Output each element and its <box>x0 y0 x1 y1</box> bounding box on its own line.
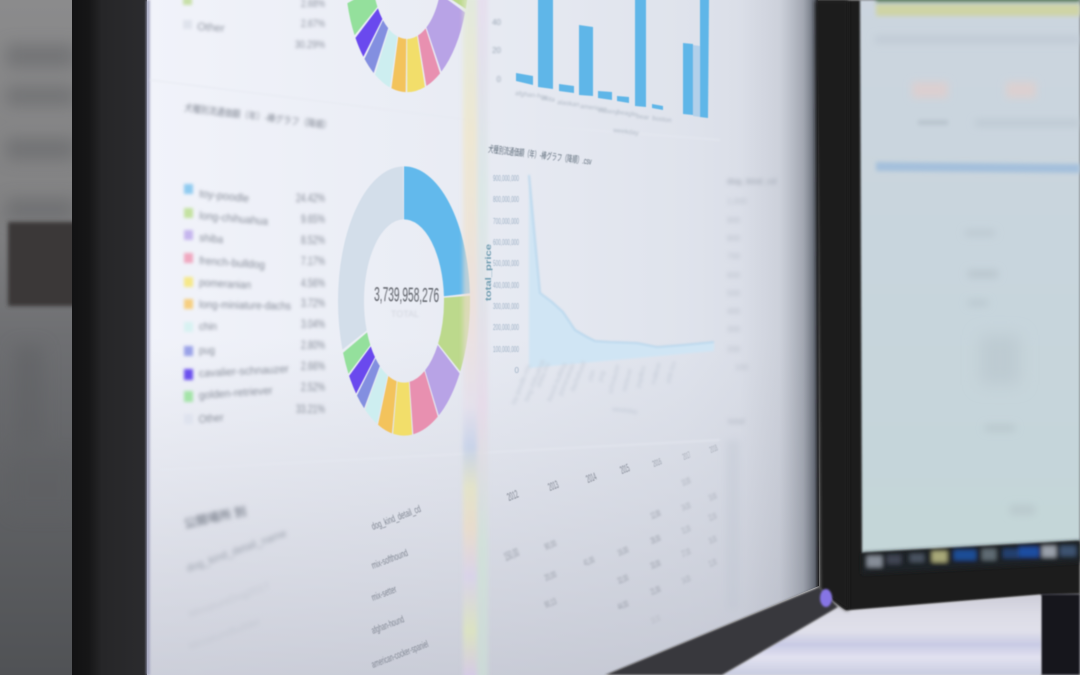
side list far right of the screen <box>727 177 776 426</box>
legend percentages: 3.72% <box>301 296 325 310</box>
y axis labels: 400,000,000 <box>493 281 519 290</box>
legend percentages: 4.56% <box>301 276 325 290</box>
donut center total: TOTAL <box>391 309 419 319</box>
bar chart category labels: weekday <box>612 127 640 137</box>
area chart x labels: pomeranian <box>557 362 577 397</box>
y axis labels: 800,000,000 <box>493 195 519 204</box>
y axis labels: 100,000,000 <box>493 345 519 354</box>
area chart x labels: weekday <box>611 406 639 416</box>
legend labels <box>198 188 292 426</box>
legend percentages: 7.17% <box>301 254 325 268</box>
main monitor bottom bezel <box>605 587 838 675</box>
area chart <box>483 174 714 416</box>
area chart x labels: shiba-inu <box>535 361 552 389</box>
bar chart category labels: boston <box>652 115 672 124</box>
legend labels: toy-poodle <box>199 188 250 205</box>
table left column: MiniatureDog2017 <box>187 580 272 621</box>
bar chart <box>492 0 709 137</box>
y axis labels: 700,000,000 <box>493 217 519 226</box>
area fill and line <box>529 175 714 368</box>
side list far right of the screen: 100 <box>735 363 749 372</box>
table dog kind column: mix-softhound <box>370 548 410 572</box>
main monitor right bezel <box>815 0 848 611</box>
y axis labels: 200,000,000 <box>493 323 519 332</box>
table values: 44,00 <box>616 598 630 612</box>
table values: 41,00 <box>582 554 596 568</box>
side list far right of the screen: 800 <box>727 234 741 243</box>
table year headers: 2016 <box>651 456 663 469</box>
area chart x labels: retriever <box>621 367 634 393</box>
legend labels: long-chihuahua <box>199 210 269 228</box>
monitor stand <box>1041 594 1080 675</box>
area chart x labels <box>510 359 678 416</box>
bar chart category labels: akita <box>541 95 556 104</box>
top legend remainder <box>183 0 325 51</box>
right monitor <box>815 0 1080 675</box>
legend labels: Other <box>198 412 224 426</box>
y axis labels: 900,000,000 <box>493 174 519 183</box>
table values: 32,00 <box>616 572 630 586</box>
table values: 27,00 <box>680 546 692 559</box>
legend percentages <box>296 191 325 416</box>
top donut chart partial <box>358 0 456 66</box>
table values: 21,00 <box>649 584 662 597</box>
legend percentages: 2.66% <box>301 359 325 373</box>
bar chart category labels: alaskan <box>557 99 580 109</box>
data table: 16,00 <box>707 534 718 546</box>
side list far right of the screen: 500 <box>727 289 741 298</box>
bar chart axis labels: 20 <box>492 46 502 55</box>
y axis labels <box>493 174 520 375</box>
table year headers: 2013 <box>547 479 560 494</box>
legend labels: cavalier-schnauzer <box>199 363 289 380</box>
legend percentages: 24.42% <box>296 191 325 205</box>
table values: 10,00 <box>680 475 692 488</box>
bar chart category labels: beagle <box>617 109 637 118</box>
legend percentages: 2.52% <box>301 380 325 394</box>
right monitor screen <box>860 0 1080 553</box>
legend labels: golden-retriever <box>198 385 273 402</box>
moire rainbow band <box>463 0 488 675</box>
side list far right of the screen: 200 <box>727 345 741 354</box>
donut center total: 3,739,958,276 <box>374 284 439 307</box>
side list far right of the screen: 600 <box>727 271 741 280</box>
bar chart category labels: basenji <box>598 107 619 116</box>
table dog kind column: mix-setter <box>370 584 399 604</box>
table left column: MiniatureBuilder <box>187 615 263 653</box>
table values: 33,00 <box>649 558 662 571</box>
table left column: 公開場所 別 <box>183 503 248 531</box>
table values: 28,00 <box>649 533 662 546</box>
bars <box>516 0 709 118</box>
power indicator LED <box>820 589 832 607</box>
main monitor left bezel <box>72 0 147 675</box>
right monitor bezel <box>815 0 1080 611</box>
legend percentages: 33.21% <box>296 402 325 416</box>
main donut chart <box>351 193 457 409</box>
data table: 22,00 <box>707 511 718 523</box>
data table: 19,00 <box>707 491 718 503</box>
area chart x labels: french-bulldog <box>546 362 568 403</box>
data table <box>183 440 740 675</box>
legend labels: pomeranian <box>199 277 251 292</box>
legend percentages: 2.80% <box>301 338 325 352</box>
table values: 31,00 <box>680 523 692 536</box>
legend swatches <box>184 184 193 424</box>
legend labels: pug <box>199 345 215 357</box>
legend labels: long-miniature-dachs <box>199 299 292 313</box>
bar chart category labels: bear <box>636 113 650 122</box>
heading: area chart: 犬種別流通価額（年）-棒グラフ（降順）.csv <box>488 143 593 167</box>
table values: 18,00 <box>649 613 662 626</box>
desk surface <box>722 595 1041 675</box>
legend percentages: 3.04% <box>301 317 325 331</box>
table values: 20,00 <box>543 569 558 583</box>
main monitor screen <box>146 0 819 675</box>
table values: 150,00 <box>502 545 521 564</box>
bar chart category labels <box>515 90 672 137</box>
right monitor taskbar icons <box>862 541 1080 574</box>
legend: donut categories <box>184 184 325 426</box>
table values: 24,00 <box>680 500 692 513</box>
table dog kind column: dog_kind_detail_cd <box>370 504 423 533</box>
area chart x labels: papillon <box>635 365 648 389</box>
table year headers: 2012 <box>506 489 520 504</box>
area chart x labels: shih-tzu <box>665 360 678 385</box>
table values: 12,00 <box>649 508 662 521</box>
area chart x labels: long-chihuahua <box>523 359 547 403</box>
donut center total <box>374 284 439 319</box>
heading: donut section: 犬種別流通価額（年）-棒グラフ（降順） <box>184 102 332 132</box>
table dog kind column: afghan-hound <box>370 614 406 637</box>
data table: 11,00 <box>707 557 718 569</box>
side list far right of the screen: 400 <box>727 307 741 316</box>
top legend remainder: Other <box>197 21 225 35</box>
area chart x labels: dachshund <box>569 360 588 393</box>
table dog kind column: american-cocker-spaniel <box>370 639 430 671</box>
area chart x labels: toy-poodle-mix <box>510 363 533 406</box>
side list far right of the screen: total <box>728 417 745 426</box>
table values: 16,00 <box>616 544 630 558</box>
table values: 14,00 <box>680 573 692 586</box>
side list far right of the screen: dog_kind_cd <box>727 177 776 186</box>
side list far right of the screen: 300 <box>727 325 741 334</box>
section divider lines <box>150 80 720 470</box>
y axis labels: 0 <box>515 366 520 375</box>
y axis labels: 600,000,000 <box>493 238 519 247</box>
top legend remainder: 2.67% <box>301 18 325 30</box>
bar chart axis labels <box>492 18 502 84</box>
background left of the monitor <box>0 0 80 675</box>
area chart x labels: schnauzer <box>607 363 622 395</box>
side list far right of the screen: 900 <box>727 216 741 225</box>
table year headers: 2014 <box>585 471 598 486</box>
side list far right of the screen: 1,000 <box>727 197 748 206</box>
table year headers: 2015 <box>619 462 631 477</box>
legend percentages: 8.52% <box>301 233 325 247</box>
legend labels: french-bulldog <box>199 255 265 272</box>
table values: 90,00 <box>543 538 558 552</box>
bar chart category labels: afghan-hou <box>515 90 549 101</box>
bar chart category labels: american <box>580 103 608 113</box>
side list far right of the screen: 700 <box>727 252 741 261</box>
table year headers: 2017 <box>681 450 692 462</box>
bar chart axis labels: 0 <box>497 75 502 84</box>
table year headers: 2018 <box>708 443 719 455</box>
table left column: dog_kind_detail_name <box>185 527 288 575</box>
table values: 90,13 <box>543 596 558 610</box>
area chart x labels: chin <box>587 369 597 383</box>
legend labels: shiba <box>199 232 224 246</box>
legend labels: chin <box>199 321 217 333</box>
table left column <box>183 503 288 675</box>
area chart x labels: maltese <box>650 361 663 386</box>
y axis labels: 300,000,000 <box>493 302 519 311</box>
table dog kind column <box>370 504 430 671</box>
table year headers <box>506 443 719 504</box>
legend percentages: 9.65% <box>301 212 325 226</box>
bar chart axis labels: 40 <box>492 18 502 27</box>
top legend remainder: 30.29% <box>295 39 325 51</box>
area chart x labels: pug <box>597 370 607 383</box>
y axis title: total_price <box>483 244 493 301</box>
y axis labels: 500,000,000 <box>493 259 519 268</box>
table values <box>502 475 718 626</box>
table faint side column <box>726 440 740 610</box>
